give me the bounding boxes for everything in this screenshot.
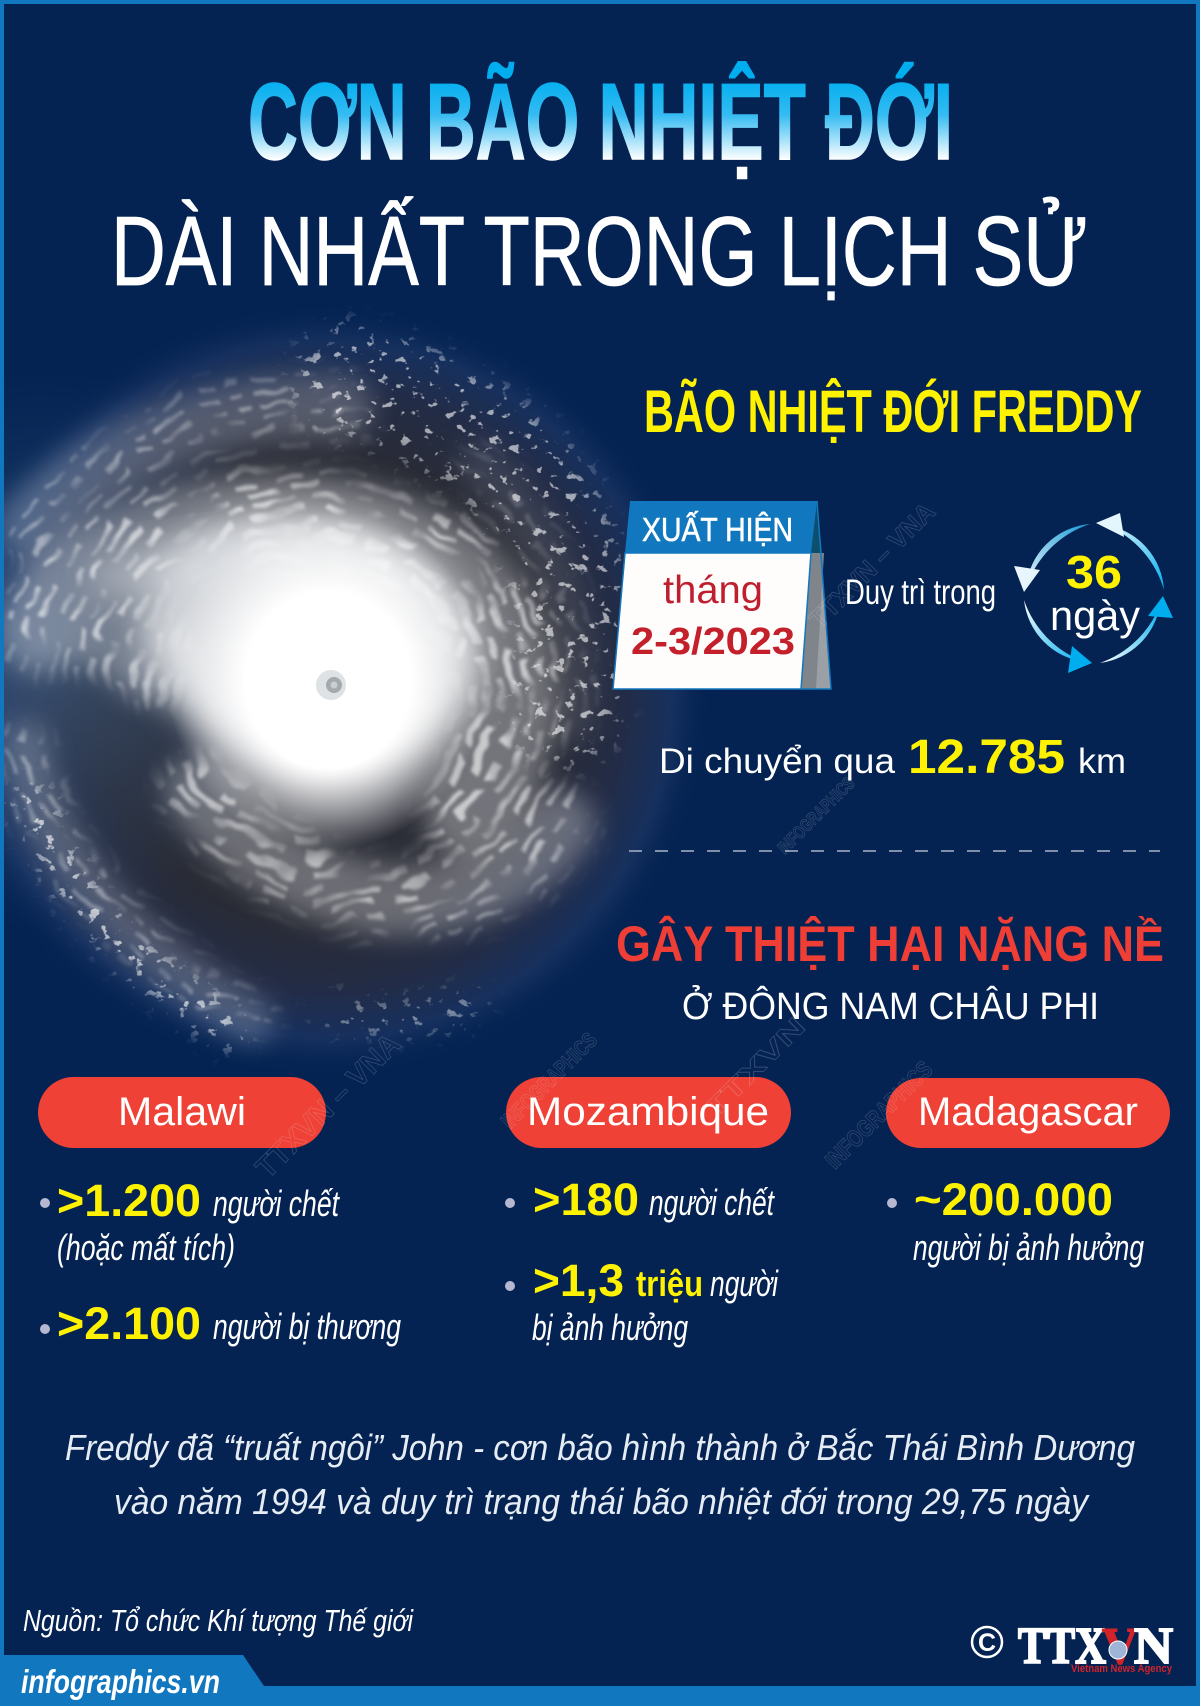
- text: duration label: Duy trì trong: [845, 573, 996, 612]
- logo: TTXVN: [972, 1618, 1173, 1675]
- source: Nguồn: Tổ chức Khí tượng Thế giới: [23, 1603, 414, 1638]
- watermarks: [250, 496, 941, 1185]
- Malawi pill: Malawi: [118, 1090, 246, 1134]
- duration badge: 36 days with circular arrows: 36: [1066, 546, 1122, 598]
- Malawi deaths: người chết: [213, 1183, 340, 1224]
- title: [111, 61, 1088, 306]
- calendar icon: appearance date: XUẤT HIỆN: [642, 511, 793, 548]
- distance travelled: km: [1078, 742, 1126, 781]
- watermarks: TTXVN – VNA: [803, 496, 941, 634]
- Malawi pill: [38, 1077, 326, 1148]
- Mozambique affected: >1,3: [533, 1255, 624, 1306]
- Mozambique affected: người: [710, 1263, 779, 1304]
- calendar icon: appearance date: tháng: [663, 569, 763, 612]
- logo: TTXVN: C: [978, 1629, 996, 1657]
- duration badge: 36 days with circular arrows: [1014, 513, 1173, 673]
- Madagascar affected: [887, 1174, 1144, 1268]
- Malawi injured: người bị thương: [213, 1306, 401, 1347]
- Mozambique affected: [505, 1255, 779, 1348]
- distance travelled: 12.785: [908, 731, 1065, 784]
- watermarks: INFOGRAPHICS: [496, 1027, 602, 1134]
- Madagascar affected: ~200.000: [914, 1174, 1113, 1225]
- footer band with site name: [0, 1655, 1200, 1706]
- watermarks: INFOGRAPHICS: [820, 1056, 938, 1174]
- subheading: region: Ở ĐÔNG NAM CHÂU PHI: [682, 984, 1099, 1028]
- Mozambique affected: triệu: [636, 1263, 703, 1304]
- Mozambique affected: bị ảnh hưởng: [532, 1307, 688, 1348]
- panel: Malawi: [38, 1077, 401, 1349]
- note: record comparison: Freddy đã “truất ngôi” John - cơn bão hình thành ở Bắc Thái Bình Dương: [65, 1427, 1135, 1468]
- calendar icon: appearance date: 2-3/2023: [631, 621, 795, 663]
- distance travelled: Di chuyển qua: [659, 742, 896, 781]
- Madagascar pill: [886, 1078, 1170, 1148]
- Mozambique deaths: người chết: [649, 1182, 775, 1223]
- panel: Madagascar: [886, 1078, 1170, 1268]
- Malawi injured: [40, 1298, 401, 1349]
- logo: TTXVN: TTX: [1018, 1618, 1106, 1675]
- footer band with site name: infographics.vn: [21, 1663, 220, 1700]
- logo: TTXVN: Vietnam News Agency: [1071, 1663, 1173, 1675]
- Malawi deaths: [40, 1175, 340, 1268]
- Mozambique pill: [506, 1077, 791, 1148]
- distance travelled: [659, 731, 1126, 784]
- storm eye: [316, 670, 346, 700]
- watermarks: TTXVN: [698, 1011, 811, 1124]
- logo: TTXVN: N: [1134, 1618, 1173, 1675]
- Mozambique deaths: >180: [533, 1174, 639, 1225]
- panel: Mozambique: [505, 1077, 791, 1348]
- Madagascar pill: Madagascar: [918, 1090, 1138, 1134]
- duration badge: 36 days with circular arrows: ngày: [1050, 592, 1140, 639]
- Malawi deaths: >1.200: [57, 1175, 201, 1226]
- Malawi deaths: (hoặc mất tích): [57, 1227, 235, 1268]
- Malawi injured: >2.100: [57, 1298, 201, 1349]
- watermarks: INFOGRAPHICS: [774, 773, 859, 858]
- watermarks: TTXVN – VNA: [250, 1027, 407, 1185]
- logo: TTXVN: V: [1102, 1618, 1138, 1675]
- storm satellite image: [0, 302, 713, 1078]
- Mozambique deaths: [505, 1174, 775, 1225]
- calendar icon: appearance date: [613, 501, 831, 689]
- note: record comparison: vào năm 1994 và duy trì trạng thái bão nhiệt đới trong 29,75 ngày: [114, 1481, 1090, 1522]
- note: record comparison: [65, 1427, 1135, 1522]
- Mozambique pill: Mozambique: [527, 1090, 769, 1134]
